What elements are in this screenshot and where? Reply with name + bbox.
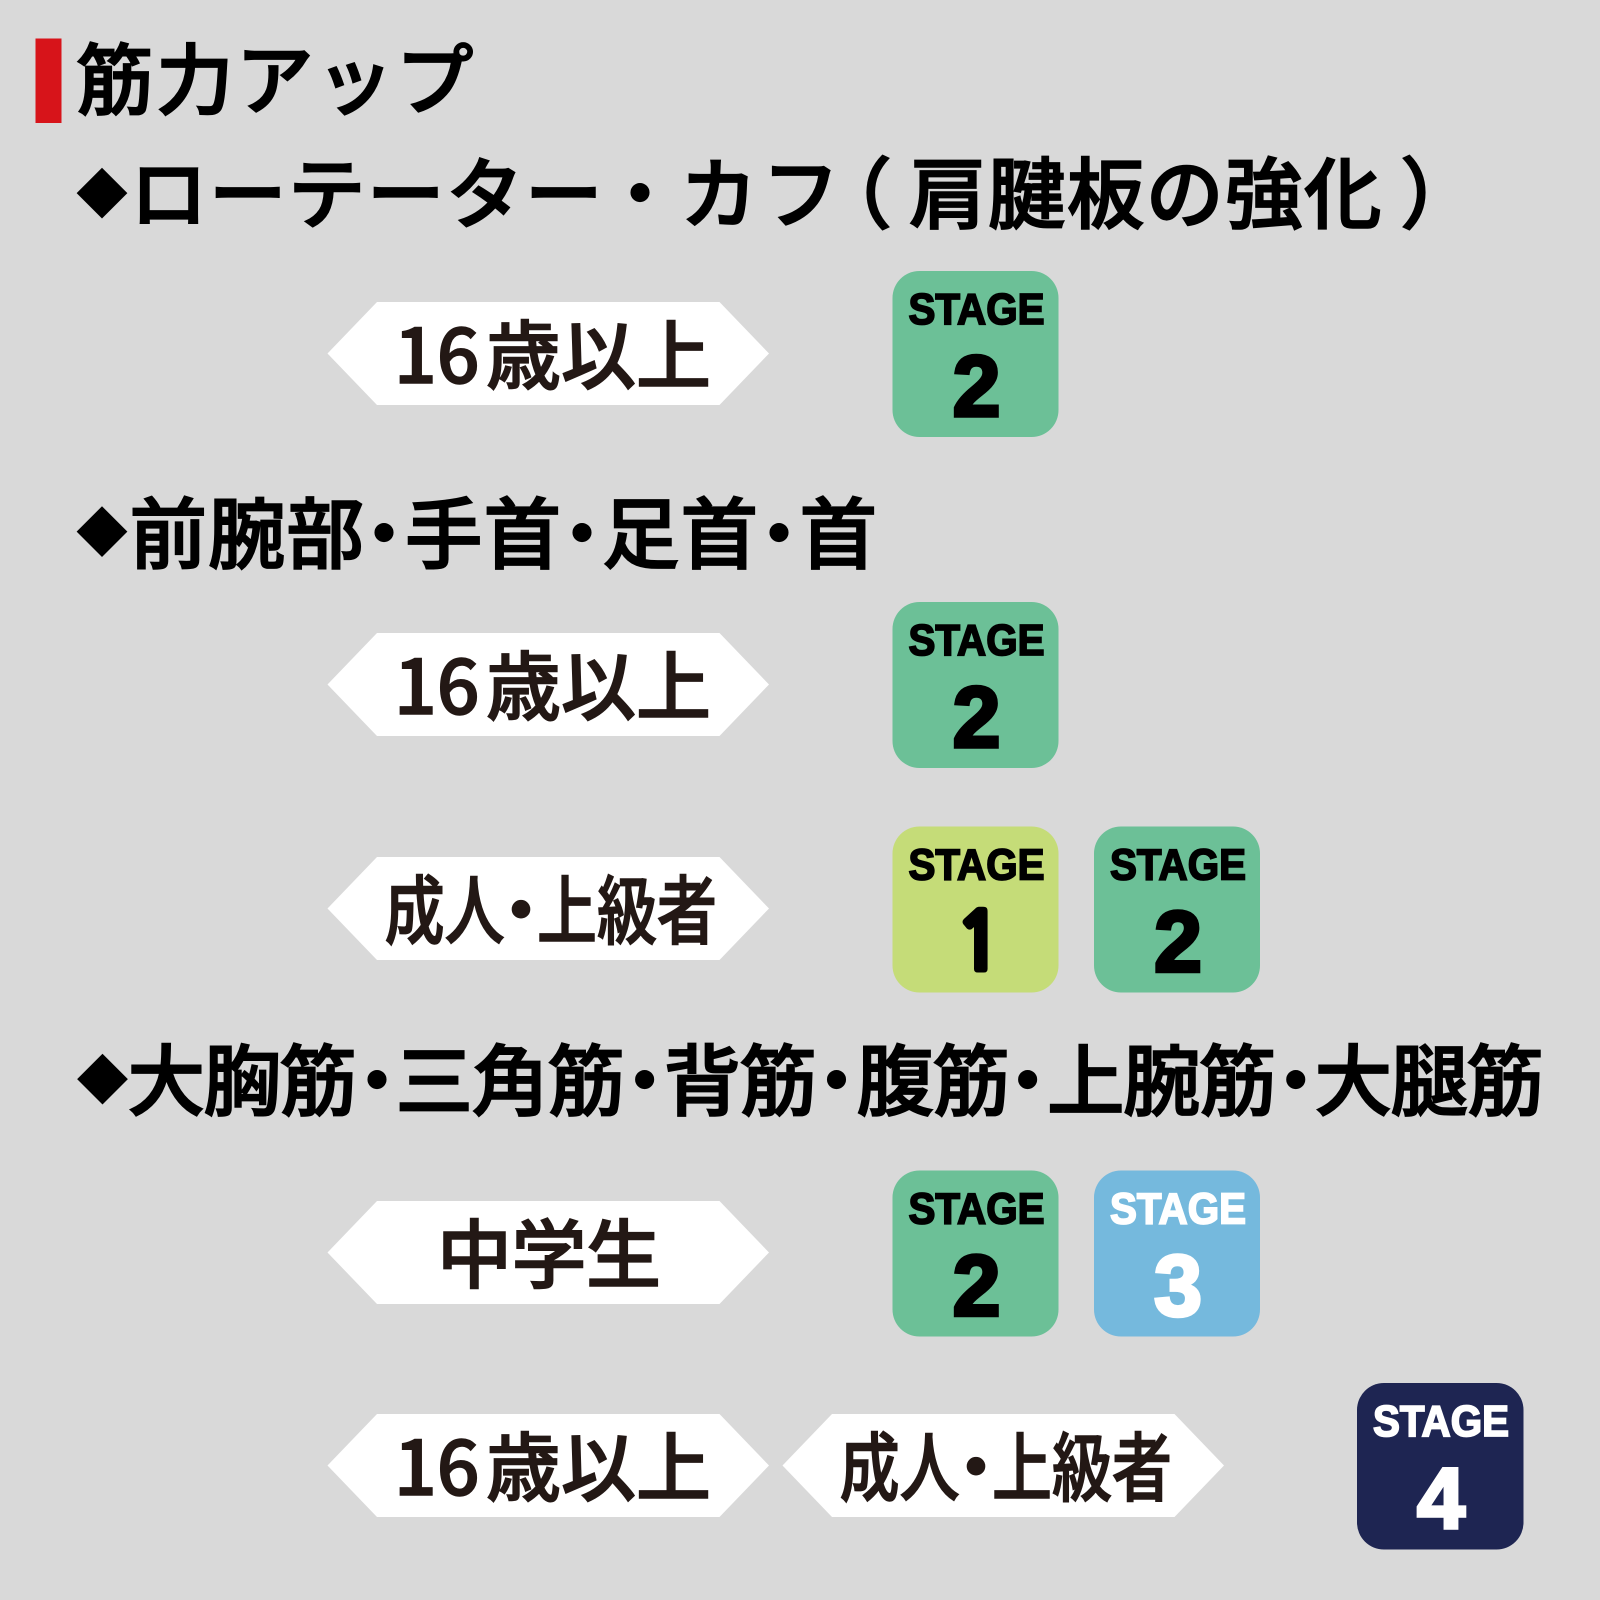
stage badge 4: STAGE — [1373, 1397, 1509, 1446]
heading: major muscles: 腹筋 — [856, 1020, 1009, 1132]
heading: major muscles: ・ — [338, 1020, 416, 1132]
stage badge 1 — [892, 826, 1058, 992]
age tag: adult advanced — [782, 1407, 1224, 1517]
stage badge 3 — [1094, 1170, 1260, 1336]
stage badge 2 — [1094, 826, 1260, 992]
heading: rotator cuff: ） — [1400, 133, 1478, 245]
age tag: 16 and over: 歳以上 — [486, 627, 711, 736]
heading: rotator cuff: ・ — [601, 133, 679, 245]
stage badge 4 — [1357, 1383, 1524, 1550]
heading: forearm, wrist, ankle, neck: 手首 — [405, 473, 562, 585]
age tag: junior high — [328, 1195, 769, 1304]
heading: major muscles: 大胸筋 — [128, 1020, 356, 1132]
heading: forearm, wrist, ankle, neck: 足首 — [602, 473, 759, 585]
heading: major muscles: ・ — [606, 1020, 684, 1132]
age tag: 16 and over: 16 — [394, 1408, 480, 1517]
stage badge 1: 1 — [955, 903, 1003, 982]
stage badge 2 — [892, 1170, 1058, 1336]
stage badge 2 — [892, 271, 1058, 437]
stage badge 3: STAGE — [1110, 1184, 1246, 1234]
heading: forearm, wrist, ankle, neck: 前腕部 — [130, 473, 365, 585]
age tag: 16 and over — [328, 1408, 769, 1517]
heading: rotator cuff: 肩腱板の強化 — [909, 133, 1383, 245]
stage badge 4: 4 — [1417, 1451, 1465, 1547]
age tag: 16 and over: 歳以上 — [486, 296, 711, 405]
heading: major muscles: 背筋 — [664, 1020, 816, 1132]
heading: major muscles: ・ — [1257, 1020, 1335, 1132]
stage badge 2: STAGE — [1110, 840, 1246, 890]
heading: forearm, wrist, ankle, neck — [76, 473, 877, 585]
age tag: adult advanced: 成人 — [385, 851, 505, 960]
heading: forearm, wrist, ankle, neck: ・ — [345, 473, 423, 585]
stage badge 2: STAGE — [908, 1184, 1044, 1234]
heading: forearm, wrist, ankle, neck: 首 — [800, 473, 877, 585]
age tag: adult advanced: 成人 — [840, 1408, 960, 1517]
stage badge 2 — [892, 602, 1058, 768]
heading: forearm, wrist, ankle, neck: ・ — [543, 473, 621, 585]
heading: major muscles: 大腿筋 — [1314, 1020, 1543, 1132]
title: 筋力アップ — [76, 19, 476, 131]
age tag: 16 and over — [328, 627, 769, 736]
heading: forearm, wrist, ankle, neck: ◆ — [76, 492, 128, 566]
heading: forearm, wrist, ankle, neck: ・ — [740, 473, 818, 585]
heading: rotator cuff: （ — [814, 133, 892, 245]
stage badge 2: 2 — [953, 670, 1000, 766]
age tag: junior high: 中学生 — [437, 1195, 661, 1304]
age tag: 16 and over — [328, 296, 769, 405]
age tag: adult advanced: ・ — [938, 1407, 1014, 1517]
age tag: 16 and over: 16 — [394, 627, 480, 736]
heading: rotator cuff — [76, 133, 1478, 245]
heading: major muscles: 上腕筋 — [1047, 1020, 1275, 1132]
age tag: adult advanced — [328, 850, 769, 960]
age tag: adult advanced: ・ — [483, 850, 559, 960]
heading: major muscles: 三角筋 — [396, 1020, 624, 1132]
heading: major muscles: ・ — [989, 1020, 1067, 1132]
heading: major muscles — [76, 1020, 1543, 1132]
stage badge 2: STAGE — [908, 285, 1044, 334]
stage badge 2: STAGE — [908, 616, 1044, 665]
age tag: 16 and over: 歳以上 — [486, 1408, 711, 1517]
age tag: adult advanced: 上級者 — [537, 851, 717, 960]
stage badge 3: 3 — [1154, 1238, 1202, 1334]
stage badge 2: 2 — [953, 339, 1000, 435]
heading: major muscles: ・ — [797, 1020, 876, 1132]
heading: rotator cuff: ◆ — [76, 153, 128, 228]
heading: rotator cuff: カフ — [680, 133, 844, 245]
age tag: 16 and over: 16 — [394, 296, 480, 405]
age tag: adult advanced: 上級者 — [992, 1408, 1172, 1517]
heading: major muscles: ◆ — [76, 1039, 129, 1114]
heading: rotator cuff: ローテーター — [130, 133, 604, 245]
stage badge 2: 2 — [1154, 894, 1202, 990]
stage badge 1: STAGE — [908, 840, 1044, 890]
stage badge 2: 2 — [953, 1238, 1000, 1334]
